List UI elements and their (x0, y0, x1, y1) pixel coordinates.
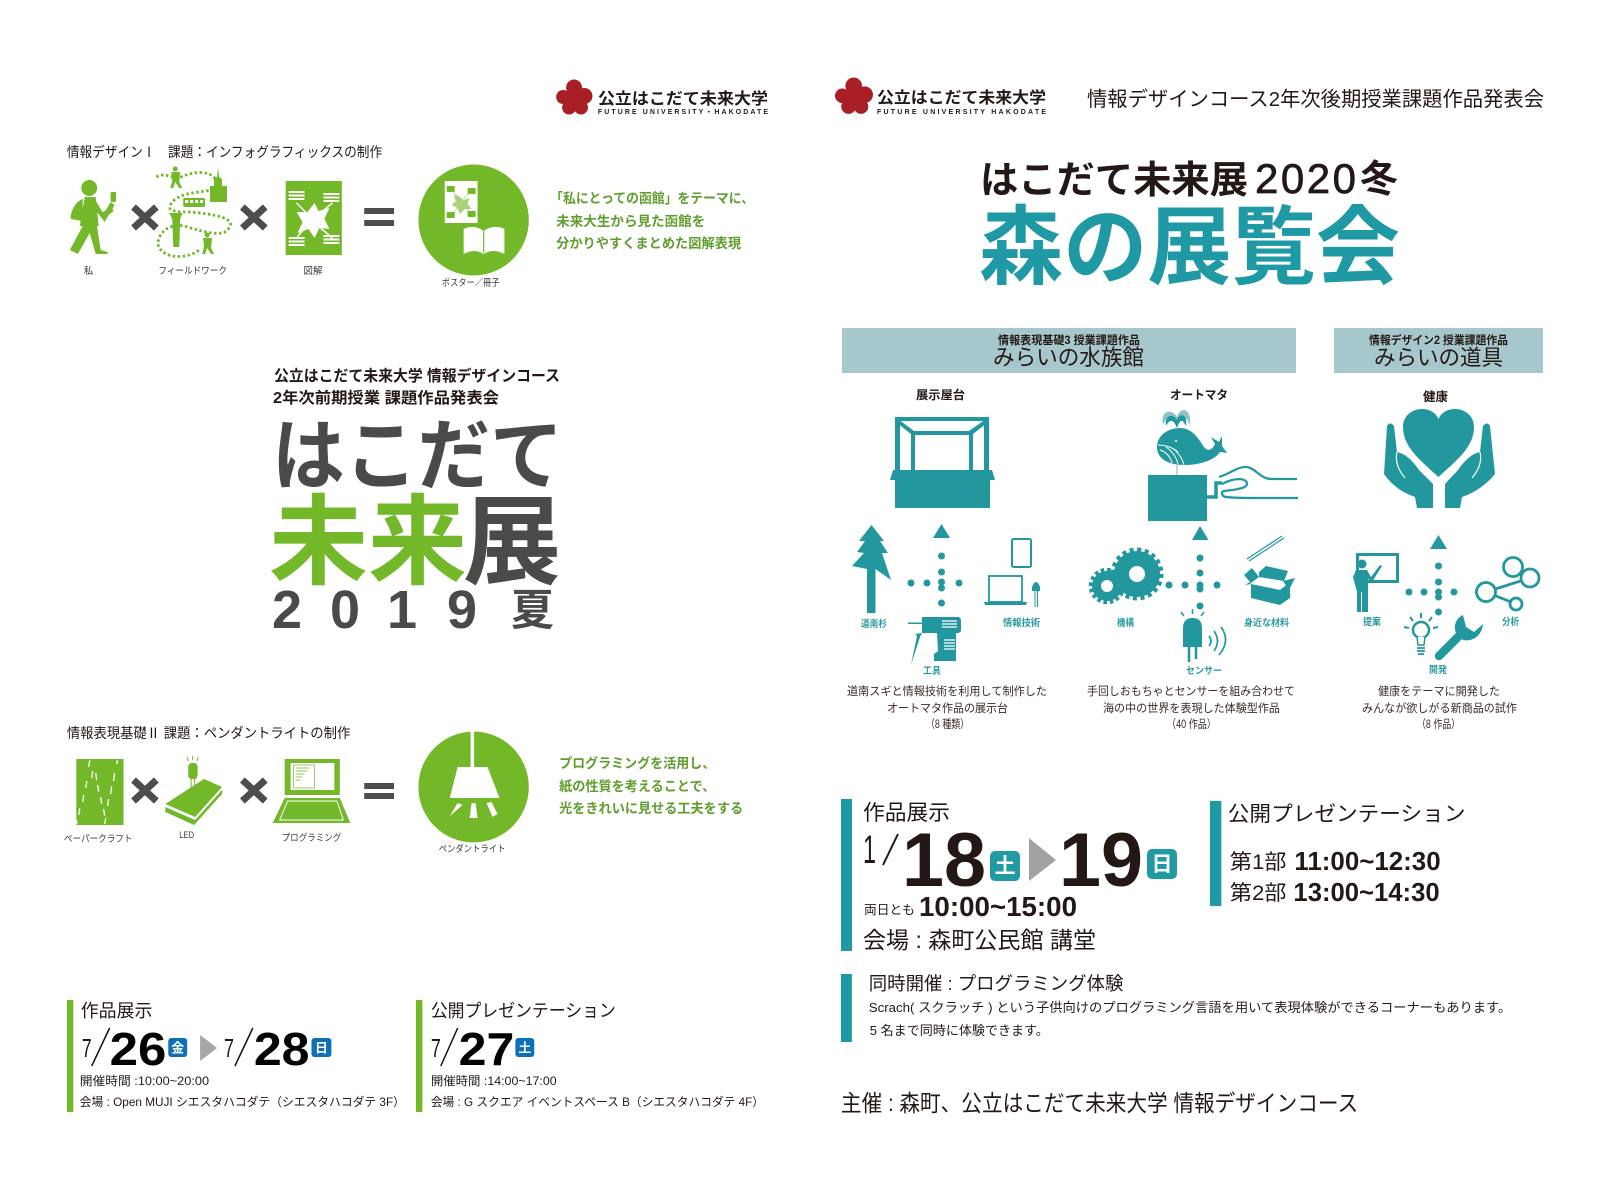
text: pendant light description: プログラミングを活用し、 (559, 755, 715, 771)
icon: equals sign (364, 208, 394, 226)
icon: tablet, laptop and LED (984, 539, 1040, 607)
text: health description: みんなが欲しがる新商品の試作 (1362, 701, 1517, 715)
schedule: exhibition January: 作品展示 (863, 801, 950, 825)
title: Forest exhibition (979, 155, 1400, 296)
schedule: presentation July: 開催時間 :14:00~17:00 (431, 1074, 557, 1088)
label: proposal: 提案 (1363, 616, 1381, 628)
text: automata description: 手回しおもちゃとセンサーを組み合わせて (1087, 684, 1295, 698)
group: presentation, callout and organizers (841, 801, 1511, 1116)
schedule: exhibition January: 日 (1152, 853, 1172, 876)
heading: exhibition stall: 展示屋台 (916, 387, 965, 402)
icon: heart held in hands (1384, 409, 1495, 508)
icon: exhibition stall (890, 417, 995, 508)
label: analysis: 分析 (1502, 616, 1519, 628)
text: infographics description (550, 191, 754, 251)
text: infographics description: 「私にとっての函館」をテーマに、 (550, 191, 754, 206)
text: automata description: 海の中の世界を表現した体験型作品 (1103, 701, 1280, 715)
title: Hakodate Future Exhibition 2019 summer: 9 (447, 580, 477, 640)
label: tools: 工具 (923, 666, 941, 677)
callout: programming experience: 同時開催 : プログラミング体験 (869, 973, 1124, 994)
schedule: exhibition January: 土 (994, 855, 1016, 878)
title: Forest exhibition: 森の展覧会 (979, 200, 1400, 296)
icon: LED on board (165, 756, 222, 825)
schedule: presentation January: 公開プレゼンテーション (1228, 803, 1465, 826)
icon: whale automata box and hand (1148, 410, 1298, 521)
icon: multiply sign 4 (242, 780, 265, 801)
panel: right 2020 winter exhibition (835, 78, 1544, 1116)
text: stall description: （8 種類） (926, 717, 969, 731)
callout: programming experience: 5 名まで同時に体験できます。 (870, 1023, 1049, 1038)
schedule: exhibition January: 10:00~15:00 (919, 891, 1077, 922)
schedule: exhibition July: 26 (110, 1023, 166, 1075)
schedule: exhibition January: 18 (902, 818, 986, 903)
text: pendant light description (559, 755, 743, 816)
text: automata description (1087, 684, 1295, 731)
label: pendant light: ペンダントライト (439, 843, 505, 855)
schedule: exhibition July: 7 (224, 1035, 234, 1063)
schedule: exhibition July (67, 1000, 405, 1112)
label: mechanism: 機構 (1117, 617, 1134, 629)
panel: left 2019 summer exhibition (64, 80, 768, 1112)
callout: programming experience (841, 973, 1511, 1042)
icon: chopsticks and cardboard box (1244, 536, 1295, 605)
logo: Future University Hakodate (right) (835, 78, 1046, 116)
label: cedar: 道南杉 (861, 618, 887, 630)
title: Hakodate Future Exhibition 2019 summer: 2年次前期授業 課題作品発表会 (273, 388, 500, 407)
schedule: presentation July: 7 (431, 1035, 441, 1063)
icon: lightbulb and wrench (1404, 613, 1483, 656)
group: logo and infographics row (67, 80, 768, 289)
icon: pendant light result (418, 731, 529, 842)
schedule: presentation July: 会場 : G スクエア イベントスペース B（シエスタハコダテ 4F） (431, 1094, 764, 1109)
icon: laptop programming (273, 759, 350, 823)
icon: sensor (1181, 609, 1226, 662)
heading: health: 健康 (1423, 389, 1448, 404)
text: infographics description: 分かりやすくまとめた図解表現 (556, 235, 742, 251)
schedule: exhibition July: 28 (254, 1023, 310, 1075)
icon: cedar tree (852, 525, 891, 613)
text: health description: （8 作品） (1417, 718, 1460, 731)
icon: multiply sign 1 (133, 207, 156, 228)
icon: multiply sign 2 (242, 207, 265, 228)
logo: Future University Hakodate (right): 公立はこだて未来大学 (877, 88, 1046, 107)
icon: paper craft (76, 759, 124, 825)
schedule: exhibition July: 開催時間 :10:00~20:00 (80, 1074, 209, 1088)
band: future tools: みらいの道具 (1374, 346, 1503, 370)
title: Hakodate Future Exhibition 2019 summer (269, 366, 563, 640)
group: pendant light row and schedules (64, 725, 764, 1112)
schedule: exhibition July: 7 (82, 1035, 92, 1063)
title: Hakodate Future Exhibition 2019 summer: 夏 (511, 587, 554, 635)
band: future tools: 情報デザイン2 授業課題作品 (1369, 333, 1508, 347)
heading: course presentation: 情報デザインコース2年次後期授業課題作品発表会 (1087, 88, 1544, 111)
title: Forest exhibition: 2020 (1255, 155, 1356, 202)
schedule: presentation January: 第2部 (1230, 882, 1287, 905)
text: stall description: 道南スギと情報技術を利用して制作した (847, 684, 1047, 698)
heading: infographics assignment: 情報デザインⅠ 課題：インフォグラフィックスの制作 (67, 144, 382, 160)
label: LED: LED (179, 830, 194, 841)
schedule: presentation January (1210, 801, 1465, 907)
text: infographics description: 未来大生から見た函館を (556, 213, 705, 229)
title: Hakodate Future Exhibition 2019 summer: 公立はこだて未来大学 情報デザインコース (274, 366, 560, 385)
label: poster and booklet: ポスター／冊子 (442, 278, 500, 289)
title: Forest exhibition: 冬 (1360, 159, 1398, 201)
arrow: automata flow (1166, 526, 1220, 610)
icon: person with phone (70, 180, 116, 254)
logo: Future University Hakodate (left): FUTURE UNIVERSITY・HAKODATE (598, 109, 768, 116)
arrow: stall flow (908, 524, 962, 606)
heading: automata: オートマタ (1170, 388, 1228, 402)
text: health description: 健康をテーマに開発した (1378, 684, 1500, 698)
schedule: exhibition July: 作品展示 (81, 1001, 152, 1021)
title: Hakodate Future Exhibition 2019 summer: 1 (387, 580, 417, 640)
schedule: exhibition January: 1 (863, 828, 876, 872)
logo: Future University Hakodate (left): 公立はこだて未来大学 (598, 89, 768, 108)
label: programming: プログラミング (282, 832, 342, 844)
schedule: exhibition January (841, 799, 1177, 953)
title: Hakodate Future Exhibition 2019 summer: 未来 (269, 487, 467, 597)
band: future aquarium: 情報表現基礎3 授業課題作品 (998, 333, 1140, 347)
band: future aquarium: みらいの水族館 (993, 345, 1144, 370)
schedule: presentation July: 公開プレゼンテーション (431, 1001, 616, 1021)
text: stall description (847, 684, 1047, 731)
schedule: presentation July: 土 (518, 1040, 531, 1056)
label: information technology: 情報技術 (1003, 617, 1040, 629)
title: Hakodate Future Exhibition 2019 summer: 2 (272, 580, 302, 640)
schedule: presentation July: 27 (459, 1023, 514, 1075)
logo: Future University Hakodate (right): FUTURE UNIVERSITY HAKODATE (877, 109, 1046, 116)
heading: pendant light assignment: 情報表現基礎Ⅱ 課題：ペンダントライトの制作 (67, 725, 350, 741)
icon: share network (1476, 558, 1539, 610)
label: development: 開発 (1429, 664, 1447, 676)
title: Forest exhibition: はこだて未来展 (980, 160, 1248, 202)
icon: gears (1091, 550, 1161, 602)
label: sensor: センサー (1186, 666, 1222, 677)
icon: diagram poster (286, 181, 342, 255)
text: pendant light description: 光をきれいに見せる工夫をする (559, 800, 743, 816)
schedule: exhibition July: 金 (171, 1040, 184, 1056)
label: familiar materials: 身近な材料 (1244, 617, 1289, 629)
icon: presenter at board (1353, 554, 1398, 612)
schedule: presentation January: 13:00~14:30 (1293, 879, 1440, 907)
schedule: presentation July (416, 1000, 764, 1112)
arrow: health flow (1406, 535, 1458, 616)
icon: drill and nail (908, 617, 961, 665)
schedule: presentation January: 第1部 (1230, 851, 1287, 874)
schedule: exhibition July: 日 (315, 1040, 328, 1056)
label: diagram: 図解 (304, 265, 323, 277)
icon: equals sign 2 (364, 783, 394, 799)
schedule: exhibition July: 会場 : Open MUJI シエスタハコダテ（シエスタハコダテ 3F） (80, 1094, 405, 1109)
schedule: exhibition January: 両日とも (864, 903, 915, 917)
title: Hakodate Future Exhibition 2019 summer: 0 (330, 580, 360, 640)
schedule: exhibition January: 会場 : 森町公民館 講堂 (863, 927, 1096, 953)
label: I: 私 (84, 266, 94, 277)
callout: programming experience: Scrach( スクラッチ ) という子供向けのプログラミング言語を用いて表現体験ができるコーナーもあります。 (869, 1000, 1511, 1015)
logo: Future University Hakodate (left) (556, 80, 768, 116)
text: automata description: （40 作品） (1167, 718, 1216, 731)
text: stall description: オートマタ作品の展示台 (887, 701, 1008, 715)
icon: multiply sign 3 (133, 780, 156, 801)
label: fieldwork: フィールドワーク (158, 266, 227, 277)
band: future tools (1334, 328, 1543, 373)
text: organizers: 主催 : 森町、公立はこだて未来大学 情報デザインコース (841, 1090, 1358, 1116)
icon: poster and booklet result (418, 164, 529, 276)
schedule: presentation January: 11:00~12:30 (1294, 848, 1441, 876)
text: health description (1362, 684, 1517, 731)
label: paper craft: ペーパークラフト (64, 834, 132, 845)
schedule: exhibition January: 19 (1059, 818, 1143, 903)
title: Hakodate Future Exhibition 2019 summer: はこだて (272, 412, 563, 500)
band: future aquarium (842, 328, 1296, 373)
title: Hakodate Future Exhibition 2019 summer: 展 (463, 487, 561, 597)
text: pendant light description: 紙の性質を考えることで、 (559, 778, 715, 794)
icon: fieldwork map (156, 166, 231, 256)
